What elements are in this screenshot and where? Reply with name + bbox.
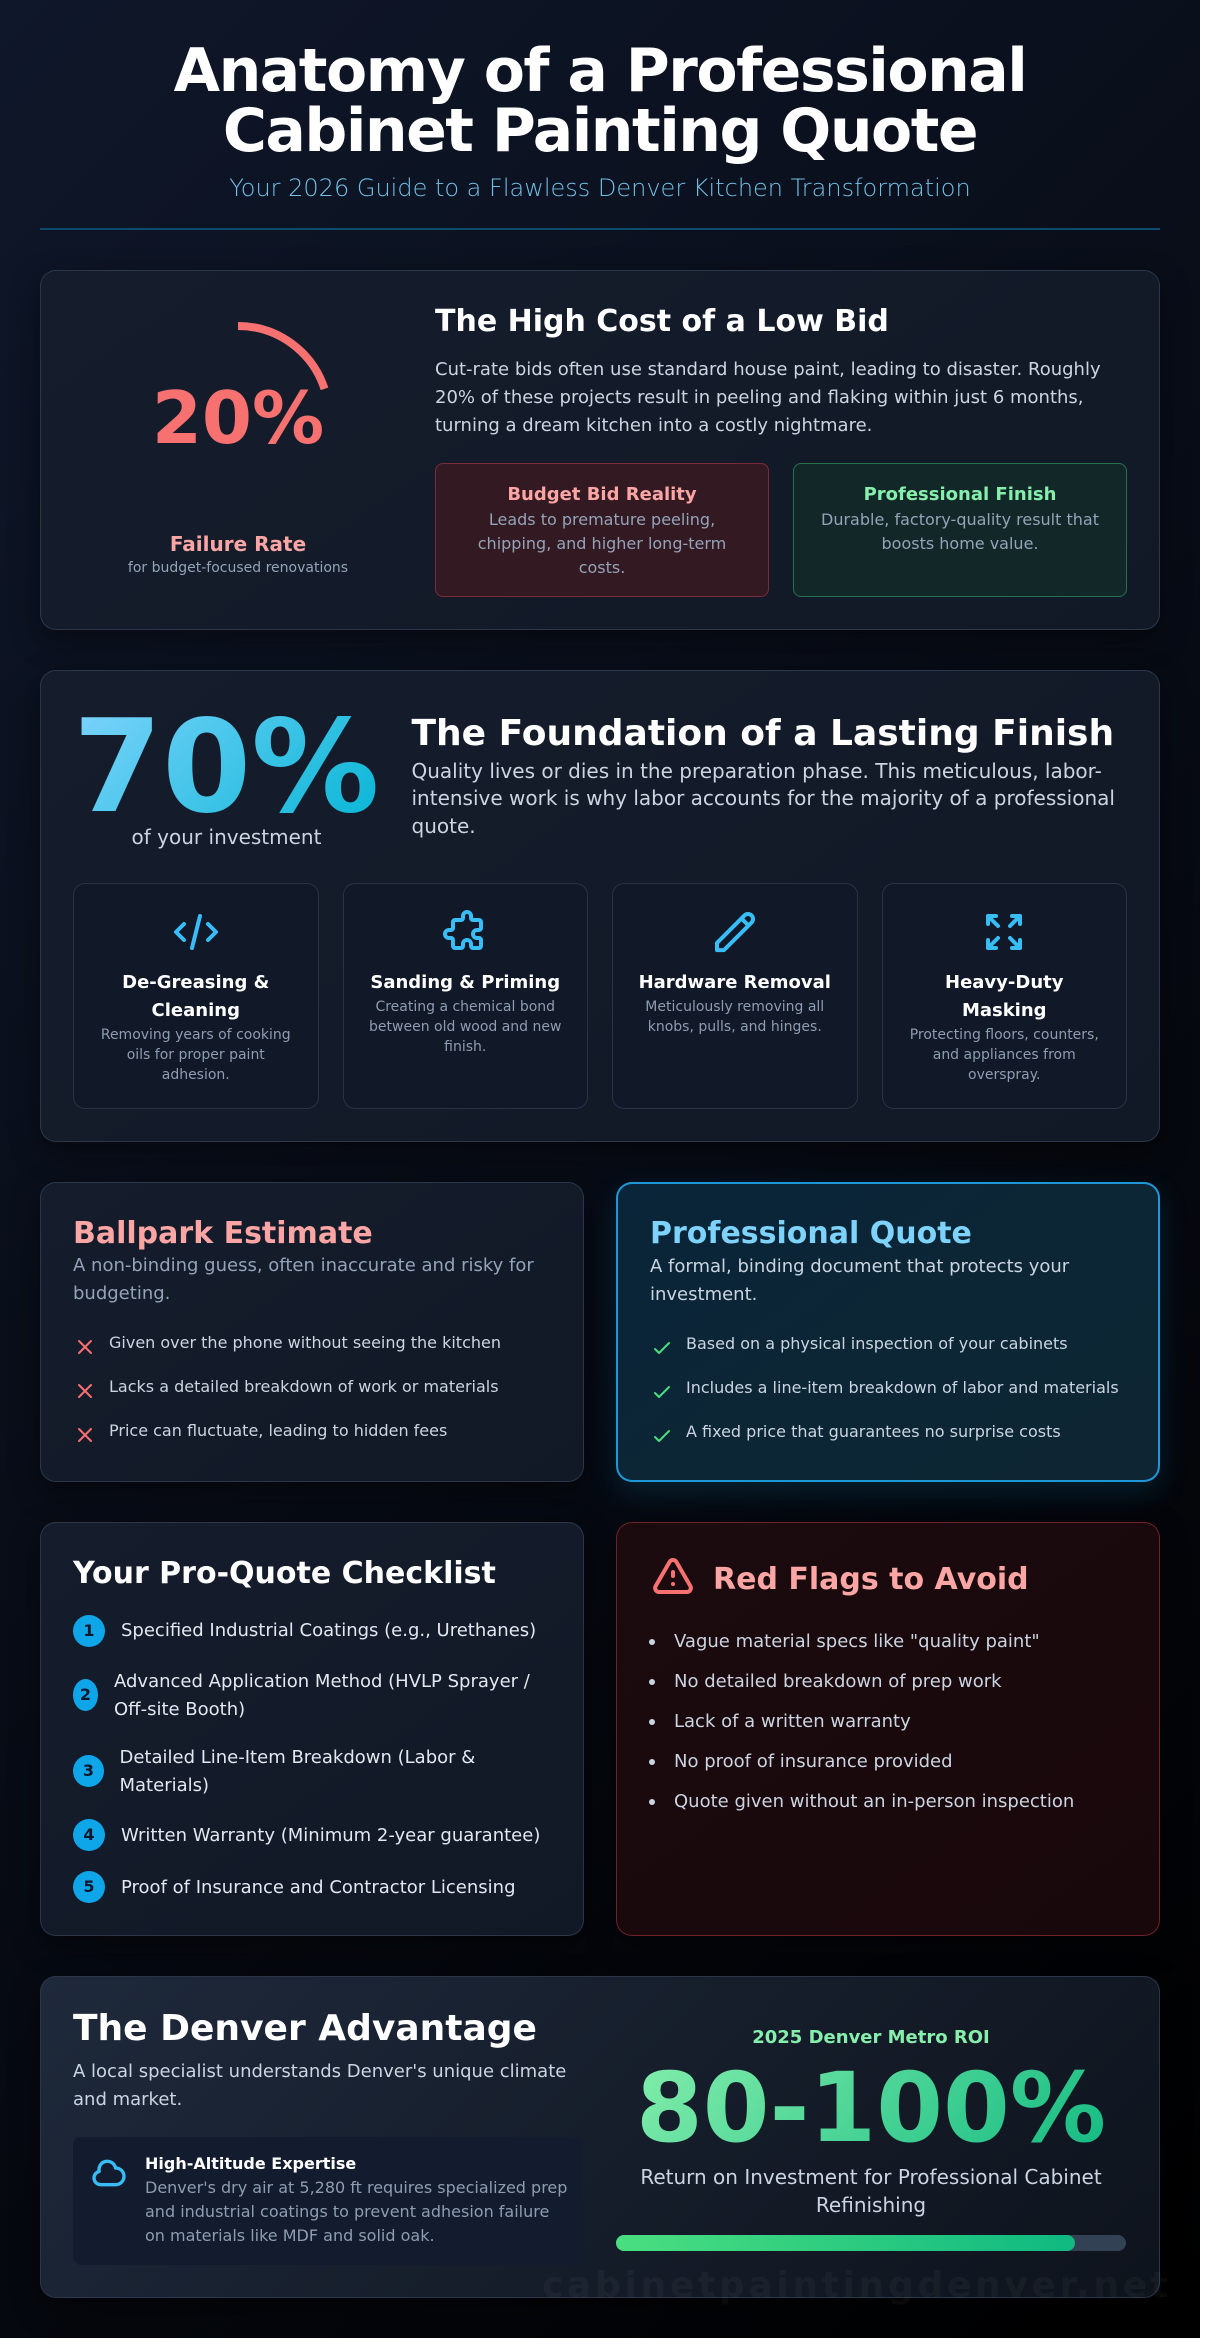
icon: puzzle [443, 910, 483, 950]
card: sanding and priming [342, 883, 588, 1109]
big stat: ROI: 80-100% [636, 2052, 1106, 2164]
number badge [73, 1755, 104, 1787]
subtitle: Your 2026 Guide to a Flawless Denver Kitchen Transformation [229, 174, 971, 202]
gauge: 20% failure rate [152, 322, 328, 460]
body text: investment. [650, 1284, 757, 1305]
red flag list: Vague material specs like "quality paint" [674, 1630, 1040, 1652]
body text: A local specialist understands Denver's unique climate [73, 2060, 566, 2082]
item text: Detailed Line-Item Breakdown (Labor & [120, 1746, 475, 1768]
list item [654, 1422, 1061, 1442]
body text: and market. [73, 2088, 182, 2110]
number badge: 4 [83, 1825, 95, 1844]
item text: Off-site Booth) [114, 1698, 245, 1720]
card text [101, 1026, 291, 1082]
checklist item 3 [73, 1746, 475, 1796]
card: heavy-duty masking [882, 883, 1127, 1109]
item text: Price can fluctuate, leading to hidden fees [109, 1421, 447, 1440]
red flag list: No detailed breakdown of prep work [674, 1670, 1002, 1692]
card text: adhesion. [162, 1066, 230, 1082]
red flag list: No proof of insurance provided [674, 1750, 953, 1772]
card: hardware removal [612, 883, 858, 1109]
item text: Advanced Application Method (HVLP Sprayer / [114, 1670, 530, 1692]
number badge [73, 1819, 105, 1851]
callout text: on materials like MDF and solid oak. [145, 2226, 435, 2244]
callout text: chipping, and higher long-term [478, 534, 726, 552]
item text: Based on a physical inspection of your cabinets [686, 1334, 1068, 1353]
card title: De-Greasing & [122, 972, 269, 993]
card text: between old wood and new [369, 1018, 561, 1034]
item text: Written Warranty (Minimum 2-year guarantee) [121, 1824, 540, 1846]
ROI caption: Refinishing [816, 2193, 926, 2217]
body text [73, 1255, 534, 1304]
title: Anatomy of a Professional [174, 36, 1026, 106]
body text: Cut-rate bids often use standard house paint, leading to disaster. Roughly [435, 359, 1101, 380]
icon: cloud [89, 2153, 129, 2193]
number badge [73, 1871, 105, 1903]
icon: cross [78, 1428, 92, 1442]
number badge [73, 1679, 98, 1711]
red flag list: Lack of a written warranty [674, 1710, 911, 1732]
card text: Protecting floors, counters, [910, 1026, 1099, 1042]
panel: the foundation of a lasting finish [40, 670, 1160, 1142]
body text [650, 1256, 1070, 1305]
number badge: 1 [83, 1621, 95, 1640]
callout: budget bid reality [435, 463, 769, 597]
ROI label: 2025 Denver Metro ROI [752, 2026, 990, 2048]
red flag list: Quote given without an in-person inspection [674, 1790, 1074, 1812]
item text: Proof of Insurance and Contractor Licensing [121, 1876, 516, 1898]
callout text: costs. [579, 558, 625, 576]
heading: The Foundation of a Lasting Finish [412, 712, 1114, 754]
icon: cross [78, 1384, 92, 1398]
title [174, 36, 1026, 166]
callout text [478, 510, 726, 576]
icon: check [654, 1342, 670, 1354]
heading: Your Pro-Quote Checklist [73, 1556, 496, 1591]
item text: Specified Industrial Coatings (e.g., Urethanes) [121, 1620, 536, 1641]
list item [654, 1378, 1119, 1398]
icon: check [654, 1430, 670, 1442]
body text [73, 2058, 566, 2114]
number badge: 5 [83, 1877, 95, 1896]
body text: quote. [412, 814, 476, 838]
gauge: 20% failure rate: 20% [152, 376, 324, 460]
checklist item 1 [73, 1615, 536, 1647]
number badge: 2 [80, 1685, 91, 1704]
callout: professional finish [793, 463, 1127, 597]
panel: the high cost of a low bid [40, 270, 1160, 630]
callout text: boosts home value. [882, 534, 1038, 552]
card text: Meticulously removing all [645, 998, 824, 1014]
gauge label: Failure Rate [170, 532, 306, 556]
ROI caption [616, 2163, 1126, 2219]
body text: budgeting. [73, 1283, 170, 1304]
icon: cross [78, 1340, 92, 1354]
item text: A fixed price that guarantees no surprise costs [686, 1422, 1061, 1441]
item text: Includes a line-item breakdown of labor and materials [686, 1378, 1119, 1397]
heading: Professional Quote [650, 1216, 972, 1251]
card text: finish. [444, 1038, 486, 1054]
heading: Red Flags to Avoid [713, 1562, 1029, 1596]
title: Cabinet Painting Quote [223, 96, 977, 166]
icon: pencil [715, 912, 755, 952]
card title: Hardware Removal [639, 972, 831, 993]
callout title: Budget Bid Reality [507, 484, 697, 504]
card title [945, 972, 1064, 1021]
list item [78, 1333, 501, 1354]
icon: code [174, 914, 218, 950]
callout text: Leads to premature peeling, [489, 510, 715, 528]
icon: warning triangle [653, 1558, 693, 1594]
heading: The Denver Advantage [73, 2008, 537, 2049]
card text [645, 998, 824, 1034]
body text: intensive work is why labor accounts for the majority of a professional [412, 786, 1115, 810]
panel: ballpark estimate [40, 1182, 584, 1482]
checklist item 5 [73, 1871, 516, 1903]
list item [654, 1334, 1068, 1354]
callout text: and industrial coatings to prevent adhesion failure [145, 2202, 549, 2220]
callout text [145, 2176, 567, 2248]
body text: A non-binding guess, often inaccurate and risky for [73, 1255, 534, 1276]
icon: expand arrows [986, 914, 1022, 950]
gauge sublabel: for budget-focused renovations [128, 560, 348, 576]
callout title: High-Altitude Expertise [145, 2154, 356, 2172]
callout: high-altitude expertise [73, 2137, 583, 2265]
checklist item 2 [73, 1670, 530, 1720]
card title: Masking [962, 1000, 1047, 1021]
list item [78, 1377, 499, 1398]
checklist item 4 [73, 1819, 540, 1851]
item text [114, 1670, 530, 1720]
card text [369, 998, 561, 1054]
card text: Creating a chemical bond [375, 998, 555, 1014]
icon: check [654, 1386, 670, 1398]
card text: overspray. [968, 1066, 1040, 1082]
body text: 20% of these projects result in peeling and flaking within just 6 months, [435, 387, 1084, 408]
panel: pro-quote checklist [40, 1522, 584, 1936]
header [40, 36, 1160, 230]
body text: Quality lives or dies in the preparation phase. This meticulous, labor- [412, 758, 1102, 782]
item text: Materials) [120, 1774, 209, 1796]
big stat: 70%: 70% [73, 693, 379, 842]
watermark: cabinetpaintingdenver.net [542, 2265, 1172, 2306]
body text: A formal, binding document that protects your [650, 1256, 1069, 1277]
heading: The High Cost of a Low Bid [435, 304, 889, 339]
card text: and appliances from [933, 1046, 1076, 1062]
card: de-greasing [73, 883, 318, 1109]
card text [910, 1026, 1099, 1082]
panel: professional quote [616, 1182, 1160, 1482]
number badge: 3 [83, 1761, 94, 1780]
card text: knobs, pulls, and hinges. [648, 1018, 822, 1034]
panel: the denver advantage [40, 1976, 1160, 2298]
card text: oils for proper paint [127, 1046, 265, 1062]
card text: Removing years of cooking [101, 1026, 291, 1042]
card title: Heavy-Duty [945, 972, 1063, 993]
card title: Cleaning [152, 1000, 240, 1021]
card title [122, 972, 269, 1021]
ROI caption: Return on Investment for Professional Cabinet [640, 2165, 1102, 2189]
body text [412, 758, 1115, 838]
body text: turning a dream kitchen into a costly nightmare. [435, 415, 872, 436]
number badge [73, 1615, 105, 1647]
list item [78, 1421, 447, 1442]
heading: Ballpark Estimate [73, 1216, 373, 1251]
card title: Sanding & Priming [370, 972, 560, 993]
red flag list [649, 1630, 1074, 1812]
callout text: Durable, factory-quality result that [821, 510, 1099, 528]
callout text: Denver's dry air at 5,280 ft requires specialized prep [145, 2178, 567, 2196]
callout text [821, 510, 1099, 552]
item text: Lacks a detailed breakdown of work or materials [109, 1377, 499, 1396]
item text [120, 1746, 475, 1796]
stat caption: of your investment [132, 824, 321, 848]
callout title: Professional Finish [864, 484, 1056, 504]
body text [435, 359, 1101, 436]
progress bar [616, 2235, 1126, 2251]
panel: red flags to avoid [616, 1522, 1160, 1936]
item text: Given over the phone without seeing the kitchen [109, 1333, 501, 1352]
